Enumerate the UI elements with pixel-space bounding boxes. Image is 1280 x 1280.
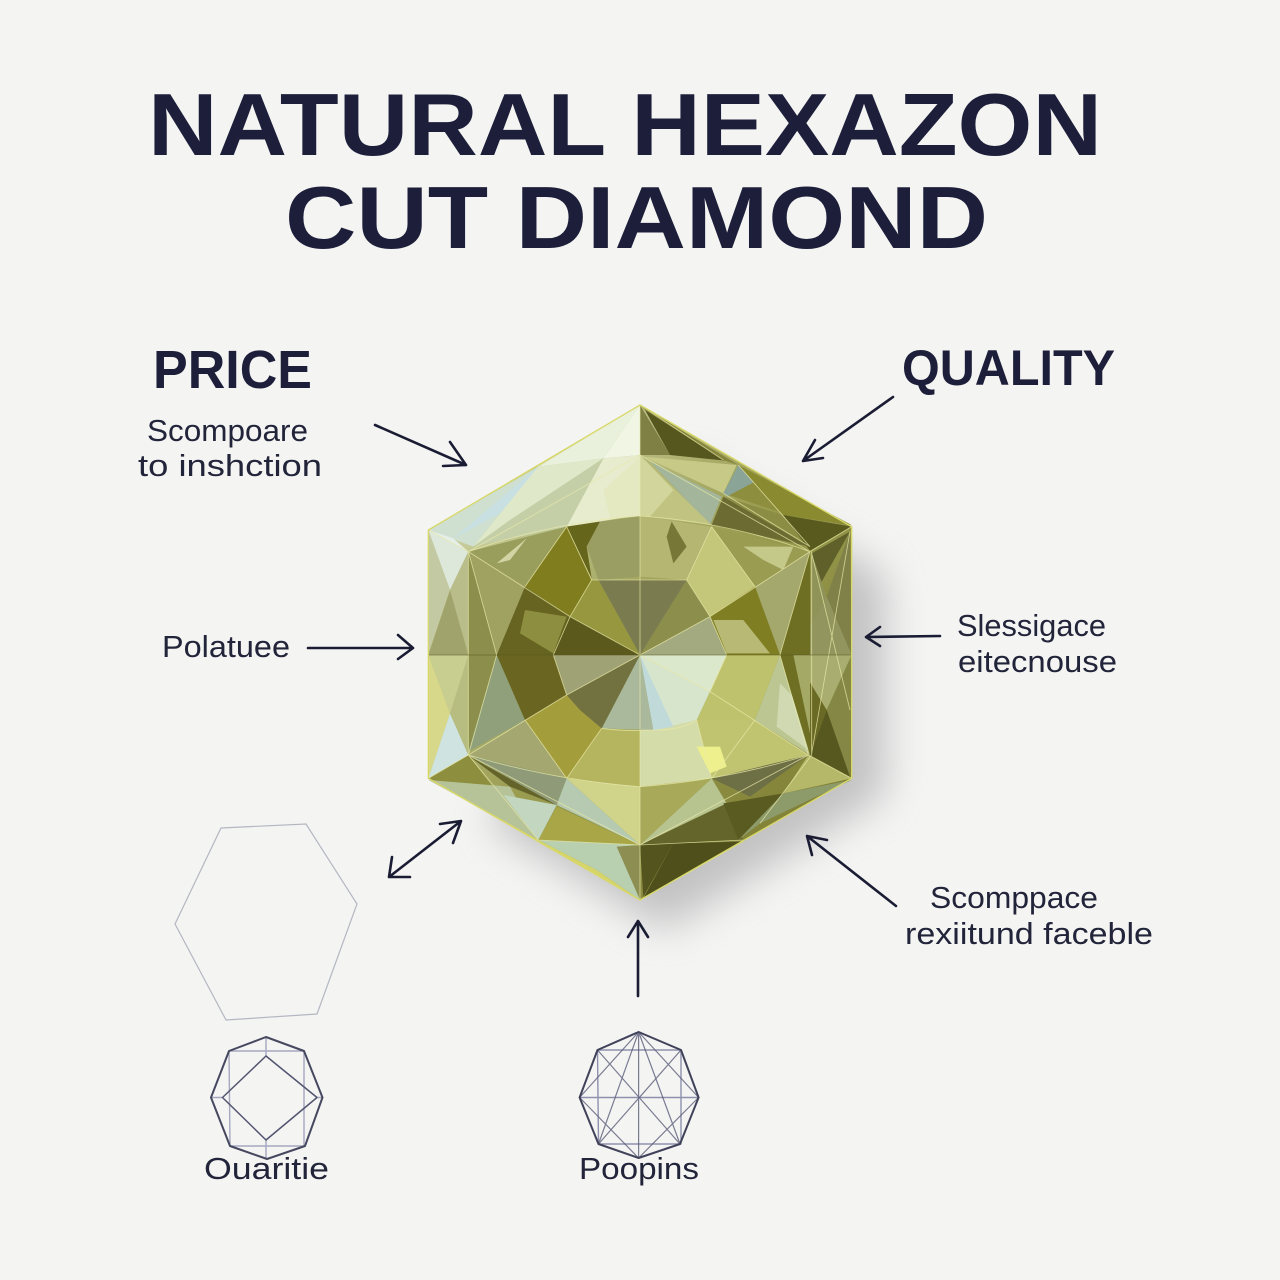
lower-left crown facets bbox=[428, 755, 640, 900]
price description: Scompoare bbox=[147, 413, 308, 448]
upper-left crown facets bbox=[428, 405, 640, 552]
arrow: double-headed bbox=[389, 821, 461, 877]
table facets bbox=[553, 580, 727, 730]
outer ring facets bbox=[468, 516, 810, 787]
diamond illustration bbox=[428, 405, 852, 900]
upper-right crown facets bbox=[640, 405, 852, 551]
arrow: quality bbox=[803, 397, 893, 461]
icon: octagon simple facets bbox=[211, 1037, 322, 1159]
right band facets bbox=[793, 532, 852, 778]
title bbox=[148, 75, 1102, 267]
price description bbox=[138, 413, 322, 483]
icon: octagon complex facets bbox=[580, 1032, 699, 1158]
label: scomppace: rexiitund faceble bbox=[905, 916, 1153, 951]
label: slessigace bbox=[957, 608, 1117, 679]
lower-right crown facets bbox=[640, 755, 852, 900]
title: NATURAL HEXAZON bbox=[148, 75, 1102, 174]
arrow: polatuee bbox=[308, 635, 413, 659]
diamond shadow bbox=[490, 460, 885, 930]
label: polatuee: Polatuee bbox=[162, 629, 290, 664]
label: scomppace bbox=[905, 880, 1153, 951]
facet edges bbox=[428, 405, 852, 900]
arrow: poopins bbox=[628, 921, 648, 996]
label: poopins: Poopins bbox=[579, 1151, 699, 1186]
heading: price: PRICE bbox=[153, 340, 312, 400]
title: CUT DIAMOND bbox=[285, 168, 988, 267]
label: slessigace: eitecnouse bbox=[958, 644, 1117, 679]
heading: quality: QUALITY bbox=[902, 340, 1115, 396]
arrow: slessigace bbox=[866, 627, 940, 646]
arrow: price bbox=[375, 425, 466, 466]
icon: hexagon outline bbox=[175, 824, 357, 1020]
label: ouaritie: Ouaritie bbox=[204, 1151, 329, 1186]
label: slessigace: Slessigace bbox=[957, 608, 1106, 643]
label: scomppace: Scomppace bbox=[930, 880, 1098, 915]
girdle line bbox=[428, 653, 852, 656]
diamond outline bbox=[428, 405, 852, 900]
price description: to inshction bbox=[138, 448, 322, 483]
diamond base bbox=[428, 405, 852, 900]
arrow: scomppace bbox=[807, 836, 896, 906]
left band facets bbox=[428, 530, 480, 778]
